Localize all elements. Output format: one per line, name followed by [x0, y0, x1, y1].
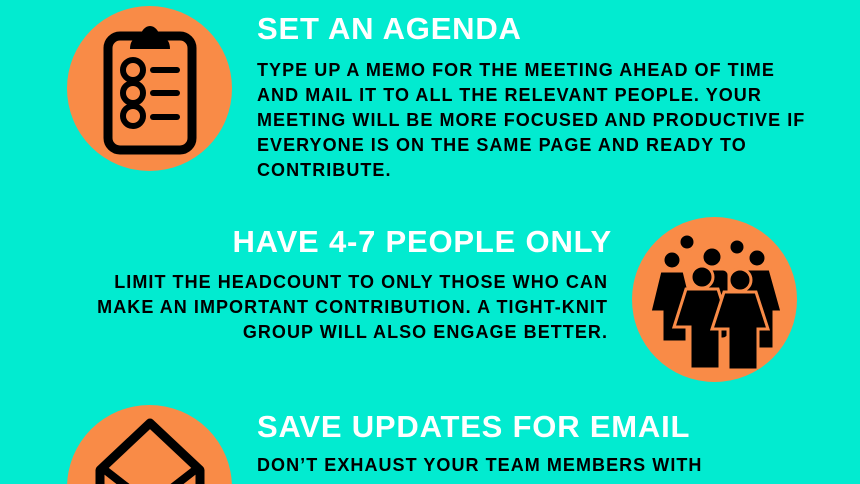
icon: group of people: [632, 217, 797, 382]
text: people body: GROUP WILL ALSO ENGAGE BETTER.: [243, 322, 608, 342]
text: agenda body: CONTRIBUTE.: [257, 160, 392, 180]
text: agenda body: EVERYONE IS ON THE SAME PAGE AND READY TO: [257, 135, 747, 155]
icon: clipboard: [67, 6, 232, 171]
heading: save updates: SAVE UPDATES FOR EMAIL: [257, 409, 690, 444]
text: agenda body: MEETING WILL BE MORE FOCUSED AND PRODUCTIVE IF: [257, 110, 805, 130]
icon: envelope: [67, 405, 232, 484]
text: people body: LIMIT THE HEADCOUNT TO ONLY THOSE WHO CAN: [114, 272, 608, 292]
text: people body: [97, 272, 608, 342]
text: agenda body: [257, 60, 805, 180]
text: people body: MAKE AN IMPORTANT CONTRIBUTION. A TIGHT-KNIT: [97, 297, 608, 317]
heading: 4-7 people: HAVE 4-7 PEOPLE ONLY: [232, 224, 612, 259]
text: agenda body: TYPE UP A MEMO FOR THE MEETING AHEAD OF TIME: [257, 60, 775, 80]
heading: set an agenda: SET AN AGENDA: [257, 11, 522, 46]
text: agenda body: AND MAIL IT TO ALL THE RELEVANT PEOPLE. YOUR: [257, 85, 762, 105]
text: email body: DON’T EXHAUST YOUR TEAM MEMBERS WITH: [257, 455, 702, 475]
